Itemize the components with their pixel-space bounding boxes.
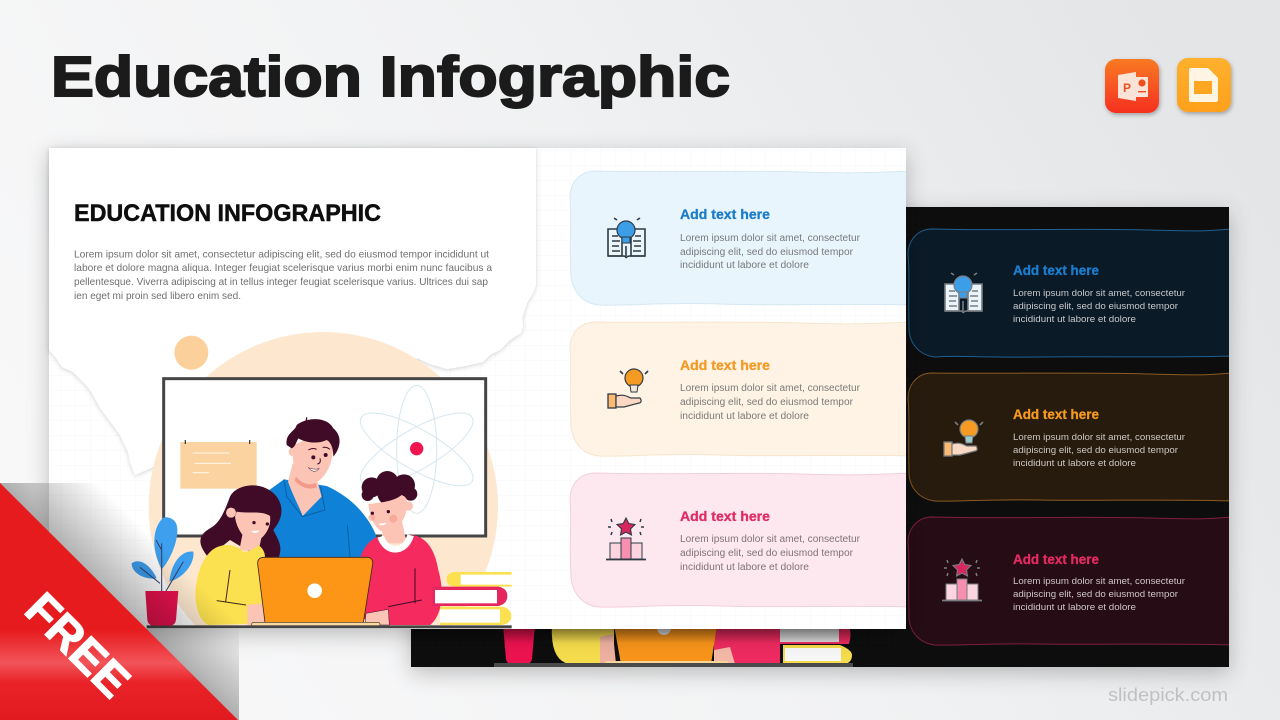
text: incididunt ut labore et dolore <box>680 260 809 271</box>
slide paragraph: labore et dolore magna aliqua. Integer feugiat scelerisque varius morbi enim nunc faucibus a <box>74 263 492 274</box>
icon: hand with bulb <box>608 369 648 408</box>
dark text: adipiscing elit, sed do eiusmod tempor <box>1013 301 1179 312</box>
slide paragraph: pellentesque. Viverra adipiscing at in tellus integer feugiat scelerisque varius. Ultrices dui sap <box>74 277 488 288</box>
ribbon shadow <box>0 483 239 720</box>
text: adipiscing elit, sed do eiusmod tempor <box>680 247 854 258</box>
title: Education Infographic <box>51 45 730 109</box>
icon: Google Slides <box>1177 58 1231 112</box>
text: adipiscing elit, sed do eiusmod tempor <box>680 548 854 559</box>
slide paragraph: ien eget mi proin sed libero enim sed. <box>74 291 241 302</box>
background circle <box>148 332 498 626</box>
watermark: slidepick.com <box>1108 685 1228 705</box>
torn paper header <box>49 148 536 475</box>
text <box>680 383 861 422</box>
dark text: incididunt ut labore et dolore <box>1013 314 1136 325</box>
dark icon: book with bulb <box>945 273 982 313</box>
text: incididunt ut labore et dolore <box>680 411 809 422</box>
whiteboard <box>164 379 486 536</box>
atom <box>351 385 482 513</box>
dark icon: hand with bulb <box>944 420 983 456</box>
card: pink <box>570 473 912 607</box>
slide paragraph: Lorem ipsum dolor sit amet, consectetur adipiscing elit, sed do eiusmod tempor incididunt ut <box>74 250 489 260</box>
dark slide illustration strip <box>494 629 853 667</box>
illustration: teacher and students <box>132 332 512 628</box>
dark text <box>1013 576 1186 613</box>
dark text <box>1013 432 1186 469</box>
heading: Add text here <box>680 508 770 524</box>
ribbon label: FREE <box>15 582 141 708</box>
dark icon: podium with star <box>942 559 982 600</box>
plant <box>132 517 193 626</box>
text: Lorem ipsum dolor sit amet, consectetur <box>680 233 861 244</box>
icon: book with bulb <box>608 218 645 258</box>
dark text: Lorem ipsum dolor sit amet, consectetur <box>1013 288 1186 299</box>
dark text: Lorem ipsum dolor sit amet, consectetur <box>1013 432 1186 443</box>
text <box>680 534 861 573</box>
books <box>433 572 512 625</box>
heading: Add text here <box>680 206 770 222</box>
icon: podium with star <box>606 518 646 560</box>
dark heading: Add text here <box>1013 263 1099 278</box>
FREE ribbon <box>0 483 238 720</box>
dark text: Lorem ipsum dolor sit amet, consectetur <box>1013 576 1186 587</box>
text: Lorem ipsum dolor sit amet, consectetur <box>680 383 861 394</box>
icon: PowerPoint <box>1105 59 1159 113</box>
dark slide <box>411 207 1235 667</box>
dark text: incididunt ut labore et dolore <box>1013 458 1136 469</box>
text <box>680 233 861 271</box>
laptop <box>252 557 380 627</box>
girl <box>195 485 281 625</box>
dark card: orange <box>908 373 1235 501</box>
dark card: blue <box>908 229 1235 357</box>
notice <box>180 440 257 489</box>
table <box>147 625 512 628</box>
slide heading: EDUCATION INFOGRAPHIC <box>74 200 381 227</box>
text: adipiscing elit, sed do eiusmod tempor <box>680 397 854 408</box>
dark text <box>1013 288 1186 325</box>
heading: Add text here <box>680 357 770 373</box>
dark text: incididunt ut labore et dolore <box>1013 602 1136 613</box>
card: blue <box>570 171 912 305</box>
slide paragraph <box>74 250 492 302</box>
card: orange <box>570 322 912 456</box>
light slide <box>49 148 912 681</box>
icon: PowerPoint: P <box>1123 81 1131 95</box>
boy <box>359 471 442 625</box>
dark text: adipiscing elit, sed do eiusmod tempor <box>1013 445 1179 456</box>
dark heading: Add text here <box>1013 552 1099 567</box>
dark heading: Add text here <box>1013 407 1099 422</box>
text: Lorem ipsum dolor sit amet, consectetur <box>680 534 861 545</box>
teacher <box>269 417 377 563</box>
dark text: adipiscing elit, sed do eiusmod tempor <box>1013 589 1179 600</box>
text: incididunt ut labore et dolore <box>680 562 809 573</box>
small circle <box>174 336 208 370</box>
dark card: pink <box>908 517 1235 645</box>
